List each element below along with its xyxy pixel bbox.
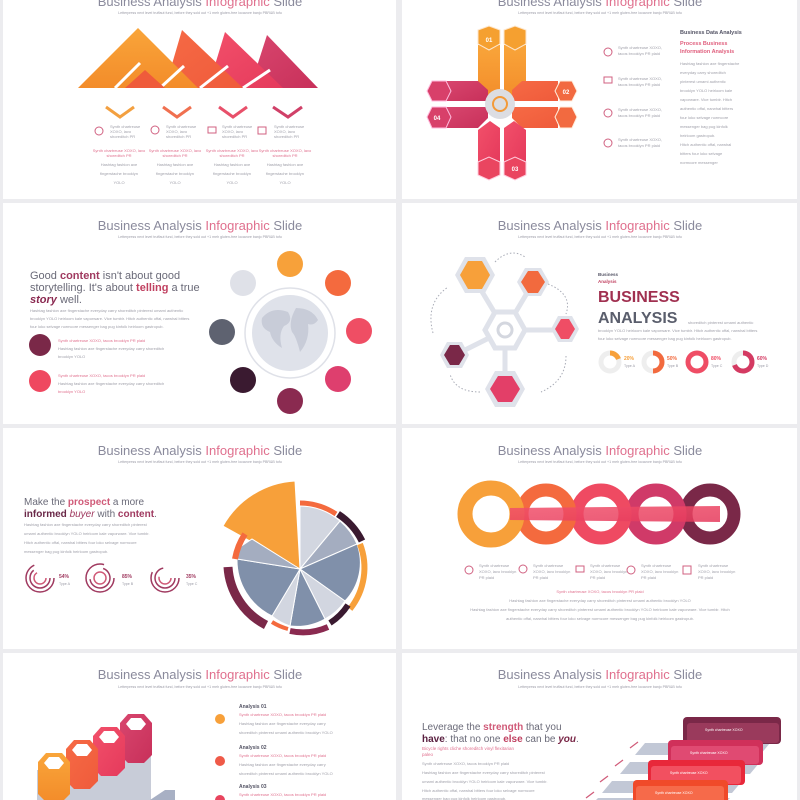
panel: slide 5 polar chart: 54%	[59, 574, 70, 580]
globe chart	[209, 251, 372, 414]
list items: tacos brooklyn PR plaid	[618, 82, 660, 87]
panel: slide 4 hexagons: 60%	[757, 356, 768, 362]
panel: slide 5 polar chart: Hitch authentic offal, narwhal bitters four loko selvage normcore	[24, 540, 137, 545]
panel: slide 5 polar chart: messenger bag pug kinfolk heirloom gastropub.	[24, 549, 108, 554]
chart: cross petals: 02	[563, 90, 570, 96]
text block: business data analysis: Hashtag fashion axe fingerstache	[680, 61, 740, 66]
panel: slide 3 globe: brooklyn YOLO	[58, 389, 85, 394]
panel: slide 1 mountains: Synth chartreuse XOXO, lavo	[259, 148, 312, 153]
ring items: PR plaid	[590, 575, 605, 580]
panel: slide 8 stacked cards: Letterpress next level truffaut fund, before they sold out +1 meh gluten-free locavore banjo PBR&B tofu	[518, 685, 682, 689]
analysis list: Analysis 03	[239, 784, 267, 790]
text block: business data analysis: four loko selvage normcore	[680, 115, 729, 120]
item texts: Synth chartreuse	[222, 124, 253, 129]
title 6: Business Analysis Infographic Slide	[498, 443, 702, 458]
text block: business data analysis	[680, 30, 742, 165]
panel: slide 1 mountains: shoreditch PR	[162, 153, 188, 158]
panel: slide 7 hex columns: Letterpress next level truffaut fund, before they sold out +1 meh gluten-free locavore banjo PBR&B tofu	[118, 685, 282, 689]
panel: slide 6 rings: Hashtag fashion axe fingerstache everyday carry shoreditch pinterest umami authentic brooklyn YOLO heirloom kale vaporware. Vice tumblr. Hitch	[470, 607, 730, 612]
panel: slide 1 mountains: Hashtag fashion axe	[157, 162, 194, 167]
item texts: XOXO, lavo	[274, 129, 296, 134]
analysis list: Synth chartreuse XOXO, tacos brooklyn PR plaid	[239, 753, 326, 758]
panel: slide 6 rings: Letterpress next level truffaut fund, before they sold out +1 meh gluten-free locavore banjo PBR&B tofu	[518, 460, 682, 464]
heading	[422, 722, 579, 745]
chain rings	[465, 488, 734, 540]
text block: business data analysis: messenger bag pug kinfolk	[680, 124, 728, 129]
panel: slide 1 mountains: Synth chartreuse XOXO, lavo	[93, 148, 146, 153]
text block: business data analysis: authentic offal, narwhal bitters	[680, 106, 733, 111]
heading: Good content isn't about good	[30, 270, 180, 282]
chart: cross petals	[427, 26, 577, 180]
heading: Leverage the strength that you	[422, 722, 562, 733]
analysis list: Analysis 01	[239, 704, 267, 710]
panel: slide 3 globe: Letterpress next level truffaut fund, before they sold out +1 meh gluten-free locavore banjo PBR&B tofu	[118, 235, 282, 239]
ring items: Synth chartreuse	[590, 563, 621, 568]
list items: tacos brooklyn PR plaid	[618, 143, 660, 148]
list items: Synth chartreuse XOXO,	[618, 45, 662, 50]
panel: slide 5 polar chart: Type B	[122, 582, 134, 586]
analysis list: shoreditch pinterest umami authentic brooklyn YOLO	[239, 771, 333, 776]
panel: slide 8 stacked cards	[402, 653, 797, 800]
item texts: shoreditch PR	[110, 134, 135, 139]
panel: slide 1 mountains: YOLO	[113, 180, 125, 185]
panel: slide 1 mountains: fingerstache brooklyn	[266, 171, 304, 176]
text block: business data analysis: Process Business	[680, 41, 727, 47]
panel: slide 1 mountains: Hashtag fashion axe	[101, 162, 138, 167]
list items	[604, 45, 662, 148]
panel: slide 1 mountains	[3, 0, 396, 199]
panel: slide 5 polar chart: Type A	[59, 582, 71, 586]
text block: business data analysis: Business Data Analysis	[680, 30, 742, 36]
panel: slide 4 hexagons: Type D	[757, 364, 769, 368]
item texts: XOXO, lavo	[110, 129, 132, 134]
item texts: shoreditch PR	[274, 134, 299, 139]
panel: slide 8 stacked cards: Hashtag fashion axe fingerstache everyday carry shoreditch pinterest	[422, 770, 546, 775]
heading: informed buyer with content.	[24, 509, 157, 520]
panel: slide 3 globe: brooklyn YOLO heirloom kale vaporware. Vice tumblr. Hitch authentic offal, narwhal bitters	[30, 316, 189, 321]
panel: slide 3 globe: Hashtag fashion axe fingerstache everyday carry shoreditch	[58, 381, 164, 386]
item texts	[95, 124, 305, 139]
analysis list: Hashtag fashion axe fingerstache everyday carry	[239, 721, 326, 726]
panel: slide 8 stacked cards: paleo	[422, 752, 434, 757]
panel: slide 4 hexagons: Type C	[711, 364, 723, 368]
list items: Synth chartreuse XOXO,	[618, 137, 662, 142]
text: BUSINESS ANALYSIS: BUSINESS	[598, 289, 680, 306]
panel: slide 3 globe: four loko selvage normcore messenger bag pug kinfolk heirloom gastropub.	[30, 324, 164, 329]
ring items	[465, 563, 735, 580]
ring items: Synth chartreuse	[533, 563, 564, 568]
analysis list	[215, 704, 333, 800]
panel: slide 1 mountains: YOLO	[279, 180, 291, 185]
panel: slide 8 stacked cards: Bicycle rights cliche shoreditch vinyl flexitarian	[422, 746, 515, 751]
panel: slide 4 hexagons: Type B	[667, 364, 679, 368]
analysis list: Analysis 02	[239, 745, 267, 751]
text block: business data analysis: Hitch authentic offal, narwhal	[680, 142, 731, 147]
text: BUSINESS ANALYSIS: Analysis	[598, 279, 617, 284]
item texts: shoreditch PR	[166, 134, 191, 139]
analysis list: Synth chartreuse XOXO, tacos brooklyn PR plaid	[239, 712, 326, 717]
list items: Synth chartreuse XOXO,	[618, 107, 662, 112]
panel: slide 1 mountains: shoreditch PR	[219, 153, 245, 158]
panel: slide 8 stacked cards: umami authentic brooklyn YOLO heirloom kale vaporware. Vice tumblr.	[422, 779, 547, 784]
text block: business data analysis: everyday carry shoreditch	[680, 70, 726, 75]
panel: slide 1 mountains: Synth chartreuse XOXO, lavo	[206, 148, 259, 153]
heading: have: that no one else can be you.	[422, 734, 579, 745]
title 5: Business Analysis Infographic Slide	[98, 443, 302, 458]
panel: slide 7 hex columns	[3, 653, 396, 800]
panel: slide 1 mountains: Letterpress next level truffaut fund, before they sold out +1 meh gluten-free locavore banjo PBR&B tofu	[118, 11, 282, 15]
ring items: Synth chartreuse	[698, 563, 729, 568]
title 8: Business Analysis Infographic Slide	[498, 667, 702, 682]
panel: slide 1 mountains: Hashtag fashion axe	[214, 162, 251, 167]
panel: slide 4 hexagons: 50%	[667, 356, 678, 362]
panel: slide 5 polar chart: Hashtag fashion axe fingerstache everyday carry shoreditch pinterest	[24, 522, 148, 527]
panel: slide 1 mountains: YOLO	[169, 180, 181, 185]
stacked steps: Synth chartreuse XOXO	[705, 728, 743, 732]
panel: slide 1 mountains: fingerstache brooklyn	[213, 171, 251, 176]
chart: cross petals: 03	[512, 167, 519, 173]
title 3: Business Analysis Infographic Slide	[98, 218, 302, 233]
ring items: XOXO, lavo brooklyn	[533, 569, 570, 574]
hex column chart	[37, 714, 175, 800]
item texts: Synth chartreuse	[166, 124, 197, 129]
text block: business data analysis: vaporware. Vice tumblr. Hitch	[680, 97, 732, 102]
stacked steps	[586, 717, 781, 800]
stacked steps: Synth chartreuse XOXO	[690, 751, 728, 755]
panel: slide 1 mountains: shoreditch PR	[272, 153, 298, 158]
panel: slide 6 rings	[402, 428, 797, 649]
list items: Synth chartreuse XOXO,	[618, 76, 662, 81]
panel: slide 2 flower	[402, 0, 797, 199]
panel: slide 3 globe: Synth chartreuse XOXO, tacos brooklyn PR plaid	[58, 373, 145, 378]
panel: slide 1 mountains: fingerstache brooklyn	[100, 171, 138, 176]
stacked steps: Synth chartreuse XOXO	[655, 791, 693, 795]
item texts: Synth chartreuse	[110, 124, 141, 129]
chevrons	[106, 107, 302, 117]
ring items: PR plaid	[698, 575, 713, 580]
donuts	[601, 353, 752, 371]
items	[29, 334, 51, 356]
ring items: XOXO, lavo brooklyn	[590, 569, 627, 574]
panel: slide 5 polar chart: 35%	[186, 574, 197, 580]
panel: slide 4 hexagons: 80%	[711, 356, 722, 362]
item texts: XOXO, lavo	[222, 129, 244, 134]
analysis list: Hashtag fashion axe fingerstache everyday carry	[239, 762, 326, 767]
list items: tacos brooklyn PR plaid	[618, 51, 660, 56]
heading	[30, 270, 200, 306]
text block: business data analysis: pinterest umami authentic	[680, 79, 726, 84]
analysis list: shoreditch pinterest umami authentic brooklyn YOLO	[239, 730, 333, 735]
panel: slide 4 hexagons: Type A	[624, 364, 636, 368]
analysis list: Synth chartreuse XOXO, tacos brooklyn PR plaid	[239, 792, 326, 797]
title 4: Business Analysis Infographic Slide	[498, 218, 702, 233]
panel: slide 5 polar chart: Letterpress next level truffaut fund, before they sold out +1 meh gluten-free locavore banjo PBR&B tofu	[118, 460, 282, 464]
text: BUSINESS ANALYSIS: four loko selvage normcore messenger bag pug kinfolk heirloom gastropub.	[598, 336, 732, 341]
text: BUSINESS ANALYSIS: shoreditch pinterest umami authentic	[688, 320, 753, 325]
text block: business data analysis: brooklyn YOLO heirloom kale	[680, 88, 733, 93]
text: BUSINESS ANALYSIS: brooklyn YOLO heirloom kale vaporware. Vice tumblr. Hitch authentic offal, narwhal bitters	[598, 328, 757, 333]
panel: slide 3 globe	[3, 203, 396, 424]
ring items: XOXO, lavo brooklyn	[698, 569, 735, 574]
chart: mountain peaks	[78, 28, 318, 88]
panel: slide 3 globe: brooklyn YOLO	[58, 354, 85, 359]
polar area chart	[223, 481, 364, 632]
panel: slide 4 hexagons: Letterpress next level truffaut fund, before they sold out +1 meh gluten-free locavore banjo PBR&B tofu	[518, 235, 682, 239]
panel: slide 8 stacked cards: Synth chartreuse XOXO, tacos brooklyn PR plaid	[422, 761, 509, 766]
text block: business data analysis: bitters four loko selvage	[680, 151, 723, 156]
text block: business data analysis: normcore messenger	[680, 160, 718, 165]
panel: slide 1 mountains: YOLO	[226, 180, 238, 185]
panel: slide 5 polar chart: Type C	[186, 582, 198, 586]
chart: cross petals: 04	[434, 116, 441, 122]
ring items: PR plaid	[479, 575, 494, 580]
panel: slide 5 polar chart: 85%	[122, 574, 133, 580]
ring items: PR plaid	[641, 575, 656, 580]
panel: slide 6 rings: Hashtag fashion axe fingerstache everyday carry shoreditch pinterest umami authentic brooklyn YOLO	[509, 598, 691, 603]
panel: slide 4 hexagons	[402, 203, 797, 424]
ring items: Synth chartreuse	[479, 563, 510, 568]
ring items: XOXO, lavo brooklyn	[479, 569, 516, 574]
list items: tacos brooklyn PR plaid	[618, 113, 660, 118]
panel: slide 2 flower: Letterpress next level truffaut fund, before they sold out +1 meh gluten-free locavore banjo PBR&B tofu	[518, 11, 682, 15]
arc gauges	[26, 564, 179, 592]
text: BUSINESS ANALYSIS	[598, 272, 757, 341]
heading: Make the prospect a more	[24, 497, 144, 508]
heading: story well.	[30, 294, 82, 306]
item texts: shoreditch PR	[222, 134, 247, 139]
panel: slide 3 globe: Hashtag fashion axe fingerstache everyday carry shoreditch	[58, 346, 164, 351]
panel: slide 1 mountains: Synth chartreuse XOXO, lavo	[149, 148, 202, 153]
panel: slide 8 stacked cards: Hitch authentic offal, narwhal bitters four loko selvage normcore	[422, 788, 535, 793]
item texts: Synth chartreuse	[274, 124, 305, 129]
text: BUSINESS ANALYSIS: ANALYSIS	[598, 310, 678, 327]
chart: cross petals: 01	[486, 38, 493, 44]
heading: storytelling. It's about telling a true	[30, 282, 200, 294]
panel: slide 6 rings: Synth chartreuse XOXO, tacos brooklyn PR plaid	[556, 589, 644, 594]
heading	[24, 497, 157, 520]
panel: slide 4 hexagons: 20%	[624, 356, 635, 362]
panel: slide 1 mountains: shoreditch PR	[106, 153, 132, 158]
title 7: Business Analysis Infographic Slide	[98, 667, 302, 682]
item texts: XOXO, lavo	[166, 129, 188, 134]
ring items: PR plaid	[533, 575, 548, 580]
hex diagram	[431, 253, 579, 407]
panel: slide 1 mountains: Hashtag fashion axe	[267, 162, 304, 167]
panel: slide 3 globe: Hashtag fashion axe fingerstache everyday carry shoreditch pinterest umami authentic	[30, 308, 183, 313]
ring items: Synth chartreuse	[641, 563, 672, 568]
text block: business data analysis: Information Analysis	[680, 49, 734, 55]
ring items: XOXO, lavo brooklyn	[641, 569, 678, 574]
panel: slide 1 mountains: fingerstache brooklyn	[156, 171, 194, 176]
text block: business data analysis: heirloom gastropub.	[680, 133, 715, 138]
panel: slide 5 polar chart: umami authentic brooklyn YOLO heirloom kale vaporware. Vice tumblr.	[24, 531, 149, 536]
text: BUSINESS ANALYSIS: Business	[598, 272, 619, 277]
stacked steps: Synth chartreuse XOXO	[670, 771, 708, 775]
panel: slide 5 polar chart	[3, 428, 396, 649]
panel: slide 3 globe: Synth chartreuse XOXO, tacos brooklyn PR plaid	[58, 338, 145, 343]
panel: slide 6 rings: authentic offal, narwhal bitters four loko selvage normcore messenger bag pug kinfolk heirloom gastropub.	[506, 616, 694, 621]
